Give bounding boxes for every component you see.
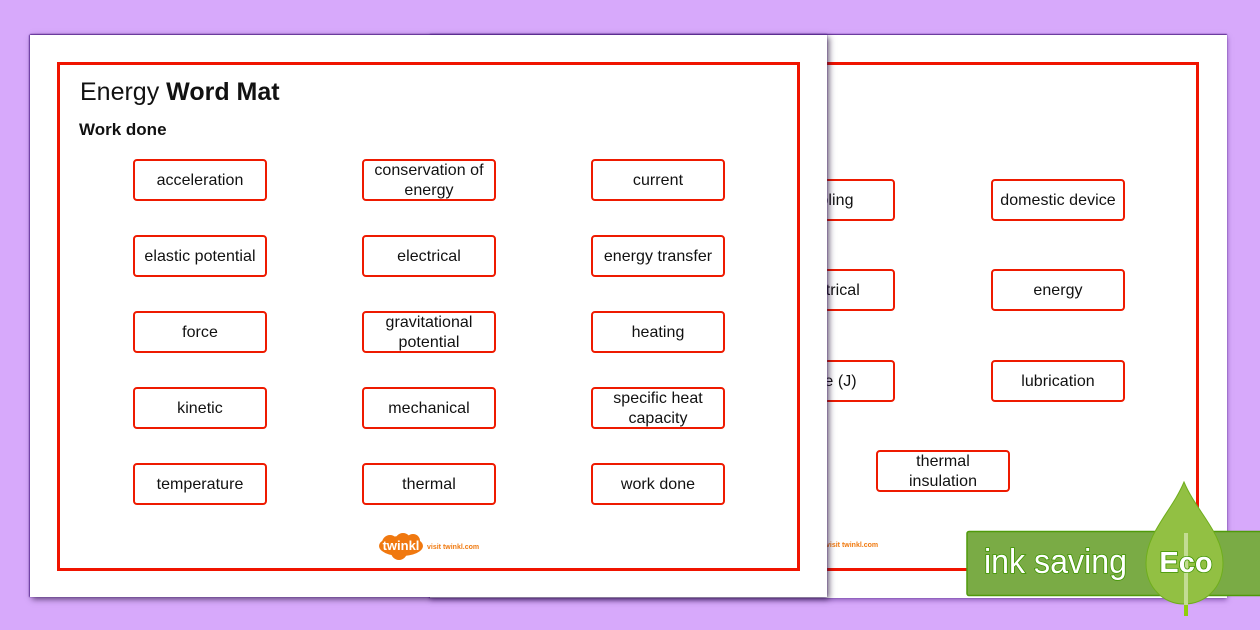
word box: lubrication xyxy=(991,360,1125,402)
leaf text: Eco xyxy=(1159,547,1213,579)
word box: acceleration xyxy=(133,159,267,201)
word box: thermal insulation: insulation xyxy=(909,472,977,490)
word box: domestic device: domestic device xyxy=(1000,192,1116,208)
twinkl logo xyxy=(379,533,479,560)
word box: kinetic: kinetic xyxy=(177,400,223,416)
word box: gravitational potential xyxy=(362,311,496,353)
back page red frame xyxy=(730,62,1199,571)
title: Energy Word Mat xyxy=(80,78,280,106)
leaf icon xyxy=(1146,482,1223,616)
word box: current: current xyxy=(633,172,683,188)
word box: elastic potential xyxy=(133,235,267,277)
word box: thermal insulation: thermal xyxy=(916,452,970,470)
word box: cooling (partly hidden) xyxy=(761,179,895,221)
word box: specific heat capacity xyxy=(591,387,725,429)
word box: domestic device xyxy=(991,179,1125,221)
logo wordmark: twinkl xyxy=(383,538,419,553)
word box: temperature: temperature xyxy=(157,476,243,492)
word box: joule (partly hidden): joule (J) xyxy=(799,372,857,390)
word box: force: force xyxy=(182,324,218,340)
word box: energy transfer: energy transfer xyxy=(604,248,712,264)
word box: acceleration: acceleration xyxy=(157,172,243,188)
word box: energy: energy xyxy=(1033,282,1083,298)
word box: conservation of energy: conservation of xyxy=(374,162,484,178)
word box: electrical (partly hidden): electrical xyxy=(796,282,860,298)
word box: energy xyxy=(991,269,1125,311)
word box: electrical (partly hidden) xyxy=(761,269,895,311)
word box: work done xyxy=(591,463,725,505)
word box: heating: heating xyxy=(632,324,684,340)
word box: temperature xyxy=(133,463,267,505)
ink saving eco badge xyxy=(966,480,1260,616)
word box: thermal xyxy=(362,463,496,505)
back page xyxy=(430,35,1227,598)
back page footer link: visit twinkl.com xyxy=(826,542,878,549)
banner text: ink saving xyxy=(984,543,1127,581)
word box: electrical xyxy=(362,235,496,277)
word box: cooling (partly hidden): cooling xyxy=(802,192,854,208)
word box: conservation of energy: energy xyxy=(404,182,454,198)
word box: force xyxy=(133,311,267,353)
word box: joule (partly hidden) xyxy=(761,360,895,402)
word box: current xyxy=(591,159,725,201)
word box: thermal: thermal xyxy=(402,476,456,492)
word box: specific heat capacity: capacity xyxy=(628,410,688,426)
word box: work done: work done xyxy=(621,476,695,492)
banner xyxy=(967,532,1260,596)
word box: mechanical: mechanical xyxy=(388,400,470,416)
word box: thermal insulation xyxy=(876,450,1010,492)
word box: conservation of energy xyxy=(362,159,496,201)
word box: gravitational potential: gravitational xyxy=(386,314,472,330)
front page red frame xyxy=(57,62,800,571)
word box: heating xyxy=(591,311,725,353)
word box: energy transfer xyxy=(591,235,725,277)
subtitle: Work done xyxy=(79,120,167,139)
word box: kinetic xyxy=(133,387,267,429)
word box: mechanical xyxy=(362,387,496,429)
word box: electrical: electrical xyxy=(397,248,461,264)
front page xyxy=(30,35,827,597)
logo cloud xyxy=(379,533,423,560)
word box: elastic potential: elastic potential xyxy=(144,248,256,264)
logo link text: visit twinkl.com xyxy=(427,544,479,551)
word box: gravitational potential: potential xyxy=(399,334,459,350)
word box: lubrication: lubrication xyxy=(1021,372,1095,390)
word box: specific heat capacity: specific heat xyxy=(613,390,703,406)
